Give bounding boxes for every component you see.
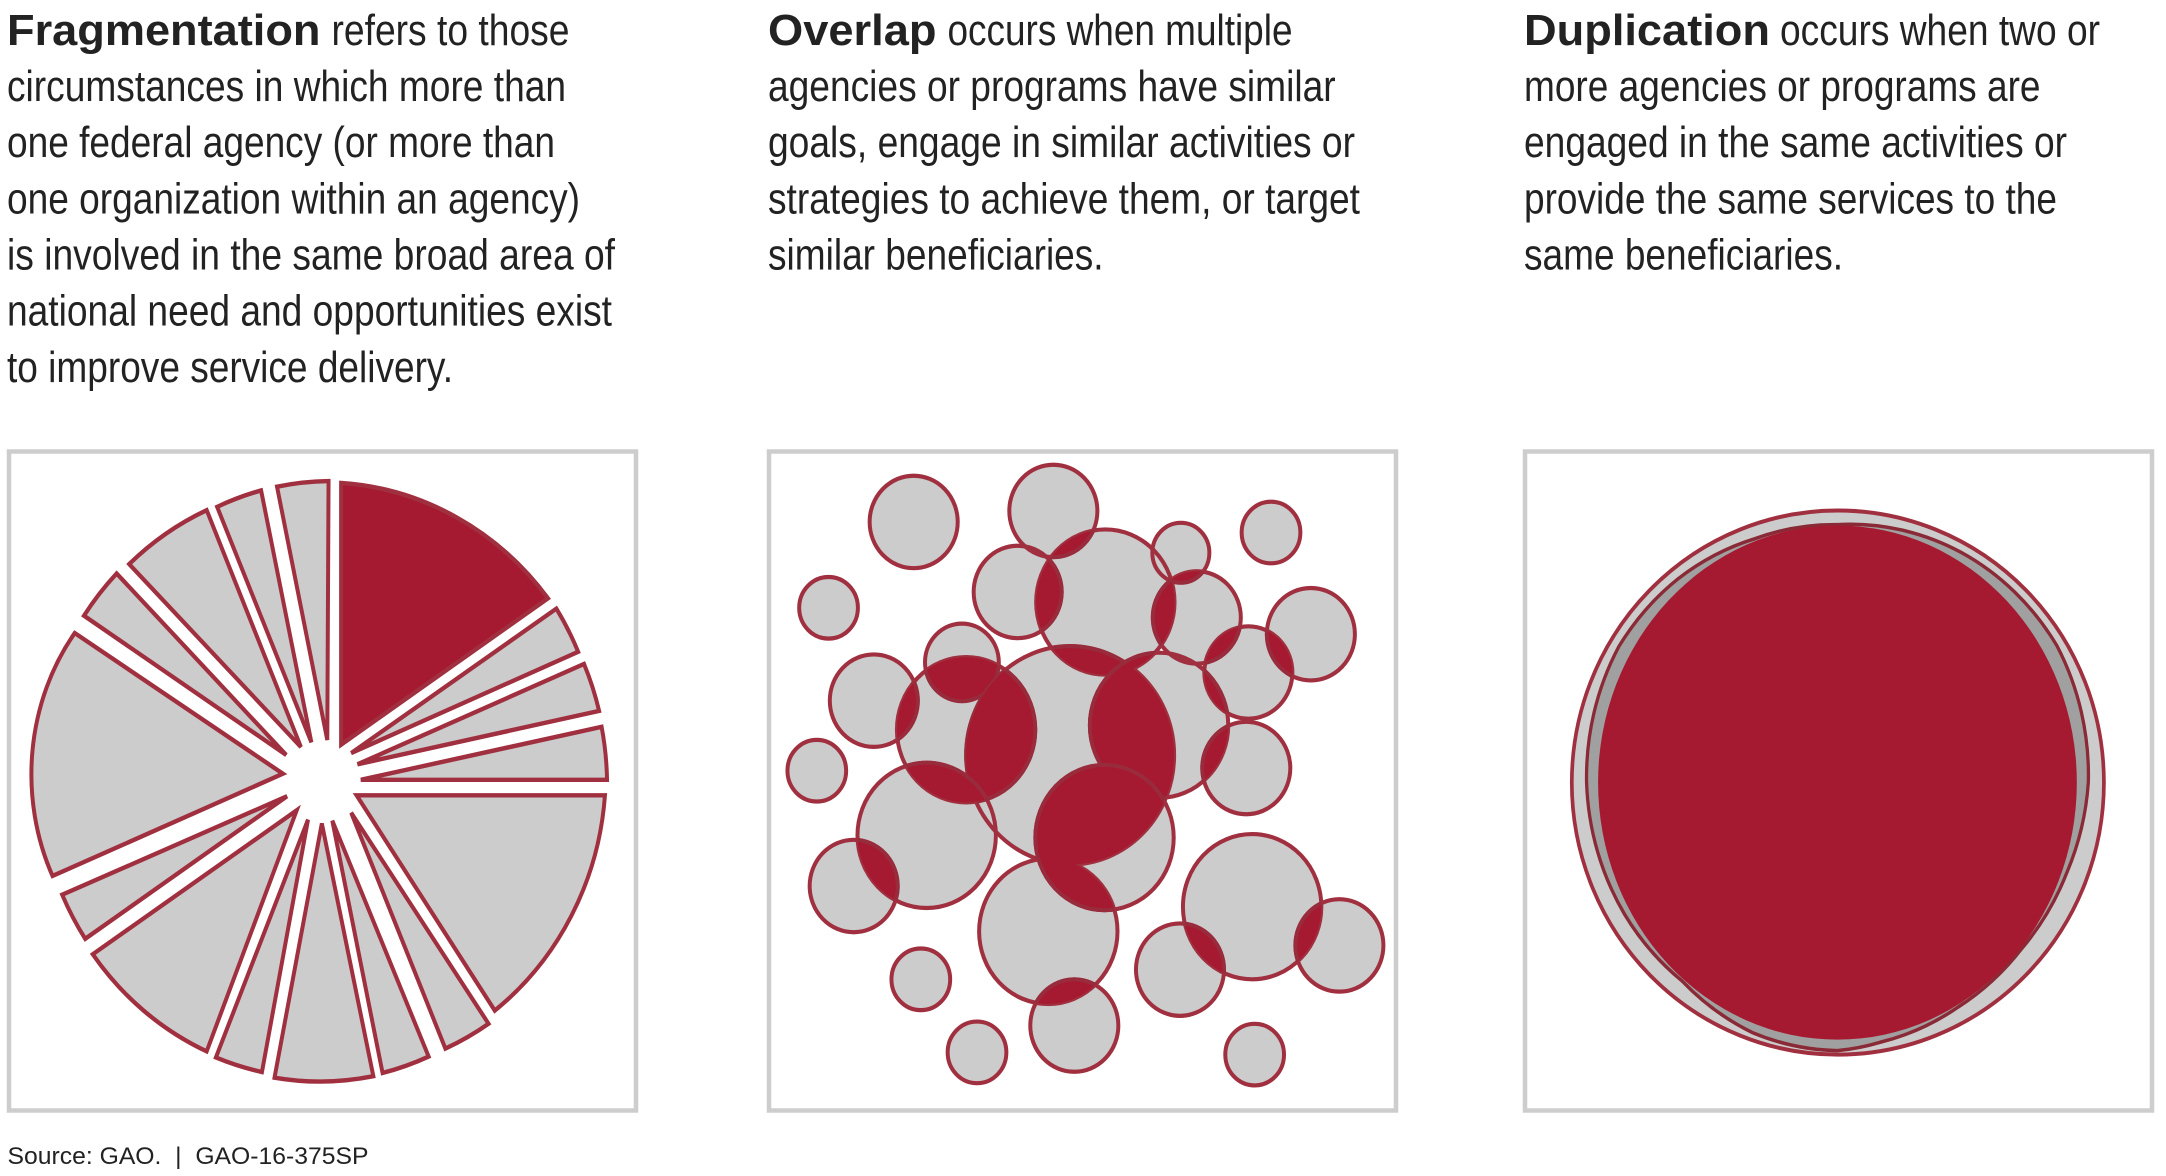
text block: fragmentation definition: refers to those	[332, 6, 570, 55]
text block: duplication definition: engaged in the same activities or	[1524, 118, 2067, 167]
text block: duplication definition: provide the same services to the	[1524, 175, 2057, 224]
panel: fragmentation frame	[9, 452, 636, 1110]
text block: duplication definition: more agencies or programs are	[1524, 62, 2040, 111]
source note: Source: GAO. | GAO-16-375SP	[8, 1143, 368, 1170]
text block: fragmentation definition: is involved in the same broad area of	[7, 231, 616, 280]
text block: duplication definition	[1524, 6, 2100, 280]
text block: duplication definition: same beneficiaries.	[1524, 231, 1843, 280]
chart: fragmented pie of separated slices	[31, 481, 607, 1082]
text block: overlap definition: strategies to achieve them, or target	[768, 175, 1360, 224]
text block: duplication definition: occurs when two or	[1780, 6, 2100, 55]
text block: overlap definition	[768, 6, 1360, 280]
text block: overlap definition: Overlap	[768, 6, 936, 55]
text block: overlap definition: goals, engage in similar activities or	[768, 118, 1355, 167]
text block: fragmentation definition: to improve service delivery.	[7, 343, 453, 392]
text block: overlap definition: similar beneficiaries.	[768, 231, 1104, 280]
text block: fragmentation definition: national need and opportunities exist	[7, 287, 612, 336]
chart: nearly coincident circles showing duplication	[1572, 511, 2104, 1055]
text block: duplication definition: Duplication	[1524, 6, 1770, 55]
text block: fragmentation definition: one federal agency (or more than	[7, 118, 555, 167]
chart: overlapping circles	[787, 465, 1383, 1085]
text block: fragmentation definition: circumstances in which more than	[7, 62, 566, 111]
text block: overlap definition: agencies or programs have similar	[768, 62, 1336, 111]
text block: fragmentation definition: Fragmentation	[7, 6, 320, 55]
text block: fragmentation definition: one organization within an agency)	[7, 175, 580, 224]
text block: fragmentation definition	[7, 6, 616, 392]
panel: overlap frame	[769, 452, 1396, 1110]
text block: overlap definition: occurs when multiple	[948, 6, 1292, 55]
panel: duplication frame	[1525, 452, 2152, 1110]
